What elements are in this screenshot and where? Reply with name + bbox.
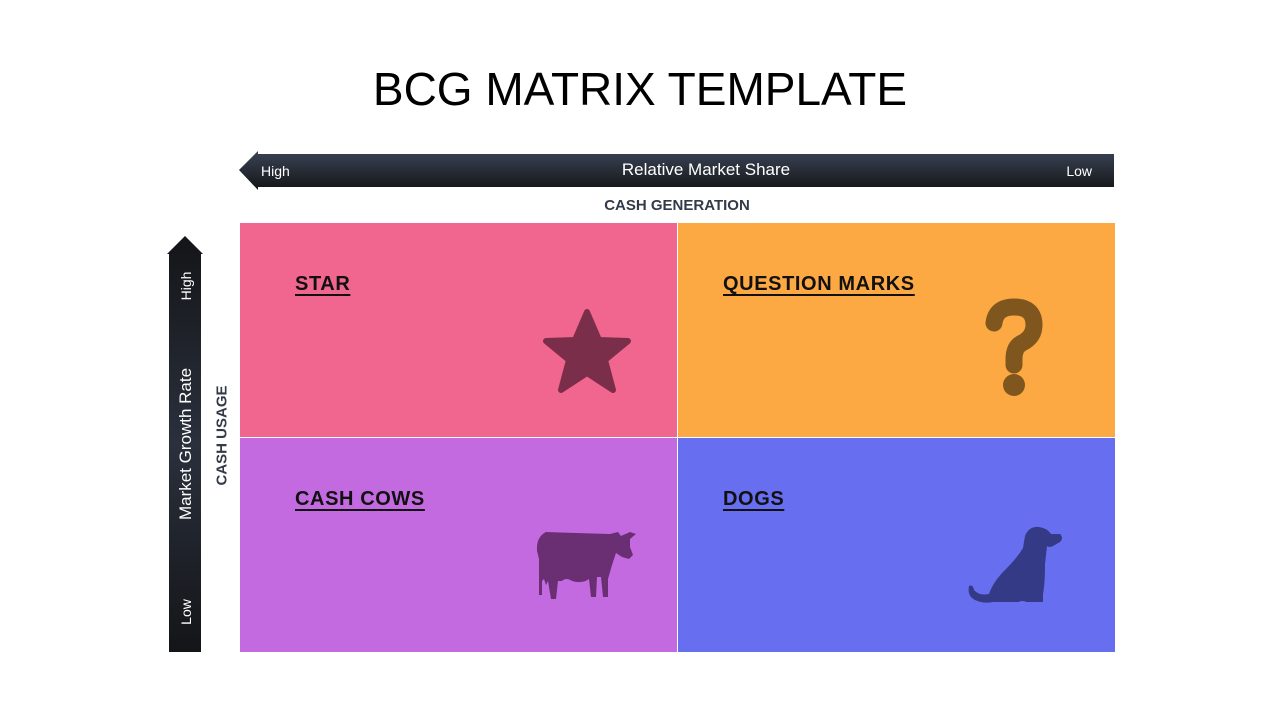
arrow: relative market share xyxy=(239,151,1114,190)
arrow: market growth rate: Low xyxy=(178,598,194,625)
icon: dog xyxy=(968,526,1062,603)
heading: cash cows: CASH COWS xyxy=(295,488,425,510)
heading: dogs: DOGS xyxy=(723,488,784,510)
heading: star: STAR xyxy=(295,273,350,295)
arrow: market growth rate xyxy=(167,236,203,652)
arrow: relative market share: Relative Market Share xyxy=(622,160,790,179)
arrow: market growth rate: Market Growth Rate xyxy=(176,368,195,520)
arrow: relative market share: High xyxy=(261,163,290,179)
arrow: market growth rate: High xyxy=(178,272,194,300)
label: cash generation: CASH GENERATION xyxy=(604,197,750,214)
quadrant: dogs xyxy=(678,438,1115,652)
icon: star xyxy=(543,309,631,393)
quadrant: question marks xyxy=(678,223,1115,437)
text: CASH USAGE xyxy=(214,386,230,486)
icon: question mark xyxy=(986,298,1042,396)
heading: question marks: QUESTION MARKS xyxy=(723,273,915,295)
quadrant: cash cows xyxy=(240,438,677,652)
quadrant: star xyxy=(240,223,677,437)
icon: cow xyxy=(536,532,636,599)
arrow: relative market share: Low xyxy=(1066,163,1093,179)
title: BCG MATRIX TEMPLATE xyxy=(373,63,907,115)
